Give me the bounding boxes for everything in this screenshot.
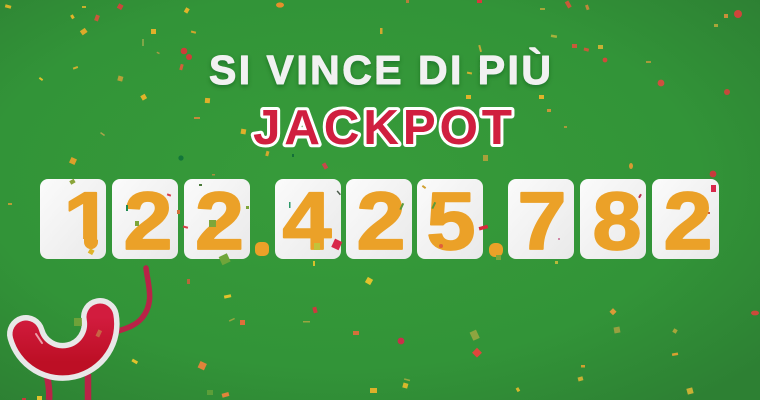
mascot right leg	[85, 374, 91, 400]
digit tile: 4	[275, 176, 341, 267]
digit tile: 8: 8	[592, 176, 642, 267]
mascot left leg	[47, 376, 49, 400]
digit tile: 1	[40, 179, 106, 259]
mascot character	[26, 268, 150, 400]
digit tile: 2: 2	[356, 176, 406, 267]
digit tile: 2	[346, 176, 412, 267]
digit tile: 4: 4	[282, 176, 332, 267]
digit tile: 5: 5	[426, 176, 476, 267]
digit tile: 2: 2	[124, 176, 172, 267]
digit tile: 1: 1	[64, 176, 112, 267]
digit tile: 5	[417, 176, 483, 267]
digit tile: 2: 2	[195, 176, 244, 267]
digit tile: 8	[580, 176, 646, 267]
digit tile: 7	[508, 176, 574, 267]
digit tile: 2	[652, 176, 719, 267]
mascot body outline	[26, 317, 101, 362]
mascot arm	[118, 268, 150, 331]
digit tile: 2: 2	[664, 176, 712, 267]
separator dot	[255, 242, 269, 256]
separator dot	[489, 243, 503, 257]
digit tile: 7: 7	[518, 176, 566, 267]
headline: si vince di più: SI VINCE DI PIÙ	[209, 47, 551, 93]
digit tile: 2	[112, 176, 178, 267]
headline: jackpot: JACKPOT	[253, 100, 512, 155]
mascot highlight	[36, 334, 42, 343]
jackpot counter	[40, 179, 719, 259]
confetti over the counter	[69, 179, 716, 266]
digit tile: 2	[184, 176, 250, 267]
mascot red body	[26, 317, 101, 362]
